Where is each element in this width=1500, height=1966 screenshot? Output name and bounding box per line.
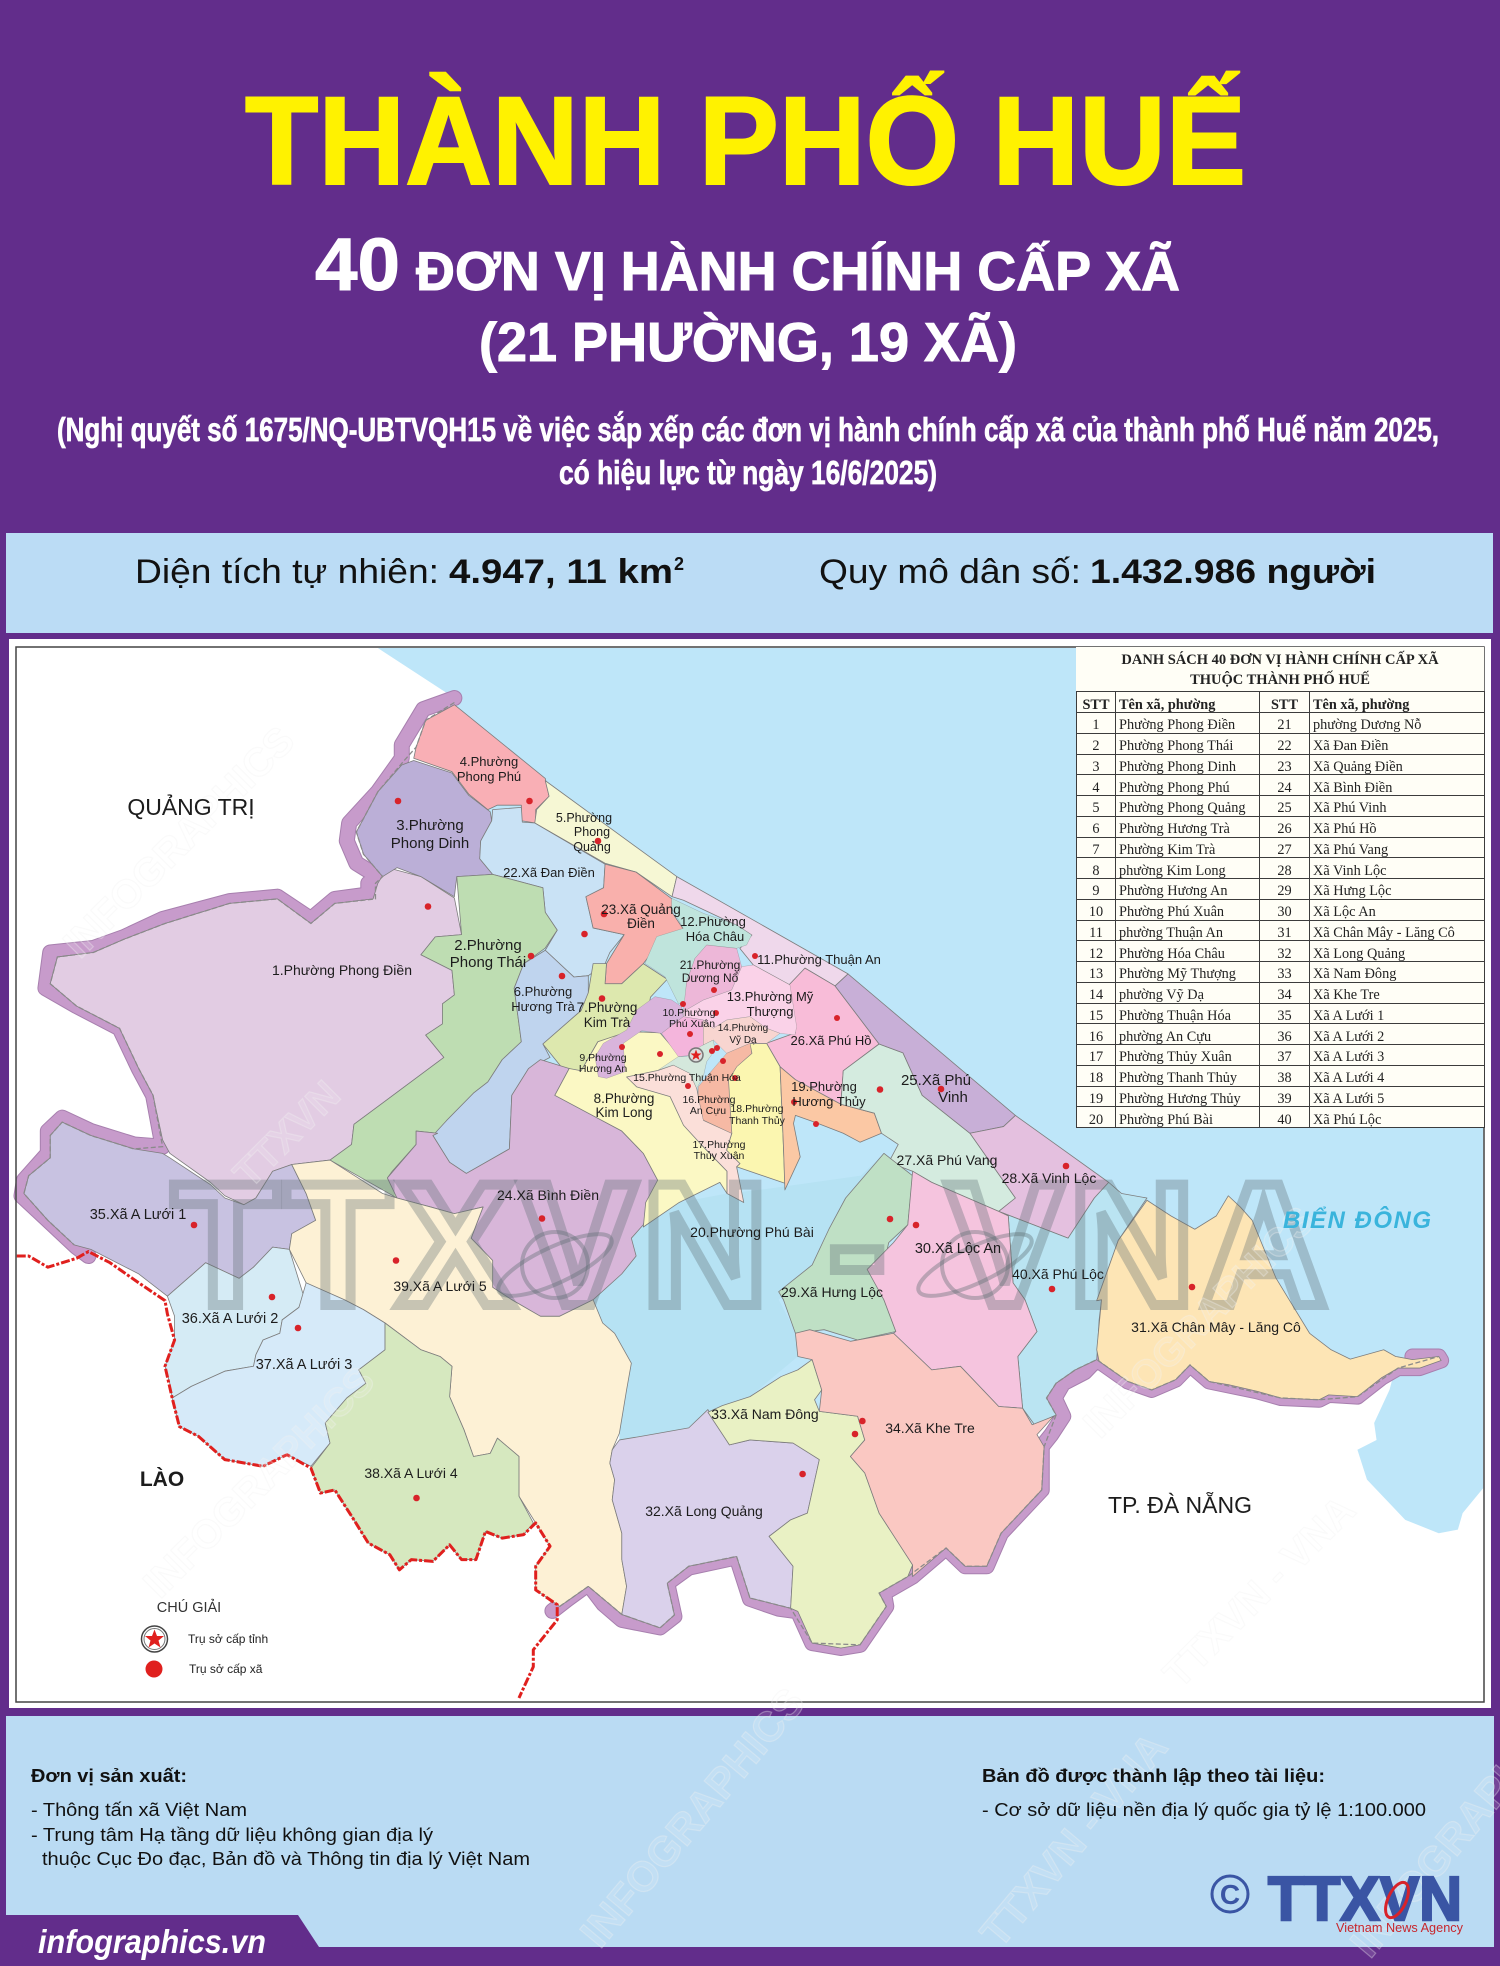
map xyxy=(17,648,1483,1698)
label 37: 37.Xã A Lưới 3 xyxy=(256,1357,352,1373)
table rows: Xã Vinh Lộc xyxy=(1313,863,1387,878)
label 16: An Cựu xyxy=(690,1105,726,1117)
faint diagonal watermarks: TTXVN - VNA xyxy=(1155,1488,1364,1696)
table rows: 9 xyxy=(1092,883,1100,899)
table rows: 10 xyxy=(1089,904,1103,920)
label 15: 15.Phường Thuận Hóa xyxy=(633,1072,741,1084)
info band: area and population: 2 xyxy=(674,554,684,574)
label 12: 12.Phường xyxy=(680,914,746,929)
label 6: Hương Trà xyxy=(511,999,575,1014)
label 29: 29.Xã Hưng Lộc xyxy=(781,1284,883,1300)
subtitle: 40 units xyxy=(315,223,1180,306)
region 7 Kim Trà xyxy=(543,964,667,1071)
table rows: 8 xyxy=(1092,863,1100,878)
table rows: Xã Lộc An xyxy=(1313,904,1376,920)
label 3: Phong Dinh xyxy=(391,835,469,852)
table rows: Phường Phong Phú xyxy=(1119,780,1230,796)
label 3: 3.Phường xyxy=(396,817,464,834)
table rows: 38 xyxy=(1277,1070,1292,1086)
icon: copyright xyxy=(1212,1876,1248,1912)
producer credits: - Trung tâm Hạ tầng dữ liệu không gian địa lý xyxy=(31,1825,433,1845)
label 19: 19.Phường xyxy=(791,1079,857,1094)
producer credits: - Thông tấn xã Việt Nam xyxy=(31,1800,247,1820)
region 39 A Lưới 5 xyxy=(289,1160,631,1614)
footer watermarks: INFOGRAPHICS xyxy=(571,1679,814,1956)
province border band (south) xyxy=(552,1356,1441,1648)
sea: Biển Đông xyxy=(378,648,1483,1533)
region 5 Phong Quảng xyxy=(535,781,677,897)
region 34 Khe Tre xyxy=(795,1330,1054,1577)
region 28 Vinh Lộc xyxy=(970,1115,1109,1238)
source credits xyxy=(982,1766,1426,1820)
label 17: Thủy Xuân xyxy=(694,1150,745,1162)
table rows: 1 xyxy=(1092,717,1100,733)
label 18: Thanh Thủy xyxy=(729,1115,786,1127)
producer credits: Đơn vị sản xuất: xyxy=(31,1766,187,1786)
communes and wards xyxy=(24,705,1441,1648)
table rows: 23 xyxy=(1277,759,1292,775)
table rows: phường Thuận An xyxy=(1119,925,1223,941)
label 5: 5.Phường xyxy=(556,811,612,825)
label 12: Hóa Châu xyxy=(686,929,744,944)
label 8: 8.Phường xyxy=(594,1091,654,1106)
table rows: Xã A Lưới 5 xyxy=(1313,1091,1384,1107)
label 14: 14.Phường xyxy=(718,1023,768,1034)
label 35: 35.Xã A Lưới 1 xyxy=(90,1207,186,1223)
region 4 Phong Phú xyxy=(414,705,549,823)
table rows: Xã Nam Đông xyxy=(1313,966,1396,982)
table heading: DANH SÁCH 40 ĐƠN VỊ HÀNH CHÍNH CẤP XÃ xyxy=(1121,652,1439,668)
table rows: Phường Thủy Xuân xyxy=(1119,1049,1232,1065)
table rows: 20 xyxy=(1089,1112,1103,1128)
label 22: 22.Xã Đan Điền xyxy=(503,865,595,880)
label 26: 26.Xã Phú Hồ xyxy=(791,1033,871,1048)
region 29 Hưng Lộc xyxy=(779,1153,913,1340)
table rows: 30 xyxy=(1277,904,1292,920)
label 38: 38.Xã A Lưới 4 xyxy=(364,1465,458,1481)
producer credits: thuộc Cục Đo đạc, Bản đồ và Thông tin địa lý Việt Nam xyxy=(42,1849,530,1869)
table rows: Phường Thanh Thủy xyxy=(1119,1070,1237,1086)
table rows: 28 xyxy=(1277,863,1292,878)
table rows: Xã Phú Hồ xyxy=(1313,821,1377,837)
legend: commune headquarters icon xyxy=(146,1660,162,1678)
region 19 Hương Thủy xyxy=(780,1067,882,1190)
resolution note xyxy=(57,411,1439,491)
producer credits xyxy=(31,1766,530,1869)
region 9 Hương An xyxy=(595,997,683,1078)
label 28: 28.Xã Vinh Lộc xyxy=(1002,1170,1096,1186)
table rows: 7 xyxy=(1092,842,1100,858)
icon: copyright: C xyxy=(1220,1879,1240,1910)
table rows: 13 xyxy=(1089,966,1103,982)
region 22 Đan Điền xyxy=(480,807,624,977)
label 36: 36.Xã A Lưới 2 xyxy=(182,1311,278,1327)
logo: TTXVN: Vietnam News Agency xyxy=(1336,1920,1463,1935)
table rows: Xã Hưng Lộc xyxy=(1313,883,1391,899)
region 27 Phú Vang xyxy=(841,1044,1015,1211)
table rows: Xã A Lưới 3 xyxy=(1313,1049,1384,1065)
info band: area and population xyxy=(6,533,1493,633)
region 2 Phong Thái xyxy=(330,874,557,1198)
info band: area and population: 1.432.986 người xyxy=(1090,553,1376,591)
headquarters dots xyxy=(191,798,1195,1501)
label 1: 1.Phường Phong Điền xyxy=(272,962,412,978)
table rows: 24 xyxy=(1277,780,1292,796)
info band: area and population: Diện tích tự nhiên: xyxy=(135,553,439,591)
resolution note: có hiệu lực từ ngày 16/6/2025) xyxy=(559,454,937,491)
table rows: Xã Phú Vinh xyxy=(1313,800,1387,816)
label 23: 23.Xã Quảng xyxy=(601,902,681,917)
provincial headquarters star xyxy=(689,1048,703,1062)
label 5: Phong xyxy=(574,825,610,839)
table rows: Xã Quảng Điền xyxy=(1313,759,1403,775)
label 21: 21.Phường xyxy=(680,958,740,972)
table rows: 34 xyxy=(1277,987,1292,1003)
footer watermarks xyxy=(571,1679,1500,1966)
table rows: Xã Phú Vang xyxy=(1313,842,1388,858)
table rows: Xã Bình Điền xyxy=(1313,780,1392,796)
table rows: phường Dương Nỗ xyxy=(1313,717,1421,733)
label 2: 2.Phường xyxy=(454,937,522,954)
table rows: 21 xyxy=(1277,717,1292,733)
region 15 Thuận Hóa xyxy=(658,1040,715,1088)
label 4: Phong Phú xyxy=(457,769,521,784)
table rows: 16 xyxy=(1089,1029,1103,1044)
map frame xyxy=(16,647,1484,1702)
faint diagonal watermarks: TTXVN xyxy=(225,1073,349,1196)
legend: CHÚ GIẢI xyxy=(157,1599,221,1616)
region 13 Mỹ Thượng xyxy=(683,965,797,1035)
label 30: 30.Xã Lộc An xyxy=(915,1241,1001,1257)
table rows: STT xyxy=(1082,696,1110,712)
watermark globes xyxy=(491,1222,1039,1308)
label 23: Điền xyxy=(627,916,655,931)
table rows: 39 xyxy=(1277,1091,1292,1107)
map panel background xyxy=(9,639,1491,1708)
table rows: 19 xyxy=(1089,1091,1103,1107)
table rows: 12 xyxy=(1089,946,1103,962)
table rows: Xã Đan Điền xyxy=(1313,738,1388,754)
label 10: Phú Xuân xyxy=(669,1018,715,1030)
label Đà Nẵng: TP. ĐÀ NẴNG xyxy=(1108,1491,1252,1518)
region 38 A Lưới 4 xyxy=(311,1323,533,1570)
region 1 Phong Điền xyxy=(50,868,462,1205)
province border band (north) xyxy=(22,698,454,1256)
subtitle: 40 units: ĐƠN VỊ HÀNH CHÍNH CẤP XÃ xyxy=(416,240,1180,302)
table rows: Tên xã, phường xyxy=(1313,696,1409,712)
label 39: 39.Xã A Lưới 5 xyxy=(393,1278,487,1294)
table rows: Phường Phú Xuân xyxy=(1119,904,1224,920)
label 11: 11.Phường Thuận An xyxy=(757,952,881,967)
table rows: STT xyxy=(1271,696,1298,712)
label 8: Kim Long xyxy=(595,1105,653,1120)
label 33: 33.Xã Nam Đông xyxy=(711,1406,819,1422)
region 37 A Lưới 3 xyxy=(172,1283,385,1466)
table rows: 2 xyxy=(1092,738,1100,754)
table rows: Xã Khe Tre xyxy=(1313,987,1380,1003)
table rows: 40 xyxy=(1277,1112,1292,1128)
table rows: 15 xyxy=(1089,1008,1103,1024)
table rows: 5 xyxy=(1092,800,1100,816)
table rows: 29 xyxy=(1277,883,1292,899)
region 14 Vỹ Dạ xyxy=(703,1017,780,1053)
label 24: 24.Xã Bình Điền xyxy=(497,1187,599,1203)
table rows: Phường Kim Trà xyxy=(1119,842,1215,858)
info band: area and population: Quy mô dân số: xyxy=(819,553,1081,591)
table rows: Phường Phong Điền xyxy=(1119,717,1235,733)
info band: area and population: 4.947, 11 km xyxy=(449,553,673,591)
label 9: Hương An xyxy=(579,1063,627,1075)
table rows: phường An Cựu xyxy=(1119,1029,1211,1044)
table rows: Phường Hóa Châu xyxy=(1119,946,1225,962)
table rows: 25 xyxy=(1277,800,1292,816)
table rows: 22 xyxy=(1277,738,1292,754)
table rows: 32 xyxy=(1277,946,1292,962)
table rows: 14 xyxy=(1089,987,1103,1003)
region 8 Kim Long xyxy=(555,1032,727,1227)
table rows: 27 xyxy=(1277,842,1292,858)
label 20: 20.Phường Phú Bài xyxy=(690,1224,814,1240)
label 7: Kim Trà xyxy=(584,1015,631,1030)
region 31 Chân Mây - Lăng Cô xyxy=(1097,1196,1441,1400)
faint diagonal watermarks: INFOGRAPHICS xyxy=(135,1358,383,1606)
table rows: Phường Hương Thủy xyxy=(1119,1091,1241,1107)
label 2: Phong Thái xyxy=(450,954,526,971)
label 16: 16.Phường xyxy=(682,1094,736,1106)
label 32: 32.Xã Long Quảng xyxy=(645,1503,763,1519)
table rows: Xã A Lưới 2 xyxy=(1313,1029,1384,1044)
region 16 An Cựu xyxy=(698,1043,752,1133)
label 17: 17.Phường xyxy=(692,1139,746,1151)
table rows: Xã Phú Lộc xyxy=(1313,1112,1381,1128)
table rows: Xã Long Quảng xyxy=(1313,946,1405,962)
tab: infographics.vn xyxy=(0,1915,319,1966)
label 7: 7.Phường xyxy=(577,1000,637,1015)
region 36 A Lưới 2 xyxy=(165,1247,304,1398)
table rows xyxy=(1076,691,1485,1128)
region 35 A Lưới 1 xyxy=(24,1122,316,1296)
table rows: Phường Mỹ Thượng xyxy=(1119,966,1236,982)
table rows: Phường Phong Quảng xyxy=(1119,800,1246,816)
table rows: Xã Chân Mây - Lăng Cô xyxy=(1313,925,1455,941)
region 6 Hương Trà xyxy=(433,950,588,1173)
label 13: 13.Phường Mỹ xyxy=(727,989,814,1004)
table rows: 33 xyxy=(1277,966,1292,982)
label 10: 10.Phường xyxy=(662,1007,716,1019)
region 33 Nam Đông xyxy=(708,1360,913,1648)
region 26 Phú Hồ xyxy=(764,968,879,1104)
region 3 Phong Dinh xyxy=(356,761,493,897)
footer panel xyxy=(0,1679,1500,1966)
label 27: 27.Xã Phú Vang xyxy=(897,1152,997,1168)
faint diagonal watermarks xyxy=(55,718,1364,1696)
label 19: Hương Thủy xyxy=(792,1094,866,1109)
watermark: TTXVN - VNA: TTXVN - VNA xyxy=(172,1148,1327,1343)
table rows: 26 xyxy=(1277,821,1292,837)
table rows: phường Vỹ Dạ xyxy=(1119,987,1204,1003)
label 25: 25.Xã Phú xyxy=(901,1072,971,1089)
label 5: Quảng xyxy=(573,840,611,854)
table rows: Xã A Lưới 4 xyxy=(1313,1070,1384,1086)
label 13: Thượng xyxy=(747,1004,793,1019)
table rows: 11 xyxy=(1089,925,1103,941)
table rows: Phường Thuận Hóa xyxy=(1119,1008,1231,1024)
label 25: Vinh xyxy=(938,1089,968,1106)
faint diagonal watermarks: INFOGRAPHICS xyxy=(1075,1198,1323,1446)
label 31: 31.Xã Chân Mây - Lăng Cô xyxy=(1131,1319,1301,1335)
table rows: Phường Phú Bài xyxy=(1119,1112,1213,1128)
subtitle: 21 wards, 19 communes: (21 PHƯỜNG, 19 XÃ) xyxy=(479,311,1017,373)
region 12 Hóa Châu xyxy=(645,898,752,1003)
region 17 Thủy Xuân xyxy=(627,1065,744,1202)
footer watermarks: TTXVN - VNA xyxy=(971,1724,1176,1956)
source credits: - Cơ sở dữ liệu nền địa lý quốc gia tỷ lệ 1:100.000 xyxy=(982,1800,1426,1820)
dashed province boundary lines xyxy=(24,702,1439,1645)
legend xyxy=(142,1599,268,1678)
table rows: Phường Phong Thái xyxy=(1119,738,1233,754)
region 25 Phú Vinh xyxy=(835,974,1015,1133)
table rows: 37 xyxy=(1277,1049,1292,1065)
legend: Trụ sở cấp xã xyxy=(189,1662,263,1676)
table rows: 17 xyxy=(1089,1049,1103,1065)
table rows: Phường Hương Trà xyxy=(1119,821,1230,837)
region 30 Lộc An xyxy=(867,1171,1037,1408)
label 6: 6.Phường xyxy=(514,984,572,999)
inner-city wards xyxy=(595,898,797,1133)
tab: infographics.vn: infographics.vn xyxy=(38,1923,266,1960)
subtitle: 40 units: 40 xyxy=(315,223,400,306)
faint diagonal watermarks: INFOGRAPHICS xyxy=(55,718,303,966)
table: list of 40 commune-level units xyxy=(1076,647,1484,1127)
label 18: 18.Phường xyxy=(730,1103,784,1115)
label 9: 9.Phường xyxy=(579,1052,627,1064)
legend: Trụ sở cấp tỉnh xyxy=(188,1632,268,1646)
table rows: 31 xyxy=(1277,925,1292,941)
label 4: 4.Phường xyxy=(460,754,518,769)
region 23 Quảng Điền xyxy=(586,864,684,984)
legend: provincial headquarters icon xyxy=(142,1626,168,1652)
table heading: THUỘC THÀNH PHỐ HUẾ xyxy=(1190,672,1370,688)
title: THÀNH PHỐ HUẾ xyxy=(245,72,1246,211)
table heading xyxy=(1121,650,1439,688)
logo: TTXVN: TTXVN xyxy=(1268,1865,1462,1934)
source credits: Bản đồ được thành lập theo tài liệu: xyxy=(982,1766,1325,1786)
label Biển Đông: BIỂN ĐÔNG xyxy=(1283,1206,1431,1234)
label 40: 40.Xã Phú Lộc xyxy=(1012,1266,1104,1282)
region 40 Phú Lộc xyxy=(999,1182,1147,1425)
table rows: 36 xyxy=(1277,1029,1292,1044)
label 34: 34.Xã Khe Tre xyxy=(885,1420,975,1436)
table rows: Tên xã, phường xyxy=(1119,696,1215,712)
table rows: Phường Hương An xyxy=(1119,883,1227,899)
table rows: 35 xyxy=(1277,1008,1292,1024)
table rows: Phường Phong Dinh xyxy=(1119,759,1236,775)
label 21: Dương Nổ xyxy=(682,971,739,985)
label Quảng Trị: QUẢNG TRỊ xyxy=(127,792,255,820)
region 21 Dương Nổ xyxy=(683,945,742,1012)
region 24 Bình Điền xyxy=(387,1060,658,1316)
label Lào: LÀO xyxy=(140,1468,184,1491)
table rows: 6 xyxy=(1092,821,1100,837)
map labels xyxy=(90,754,1431,1519)
region 11 Thuận An xyxy=(672,877,848,986)
table rows: phường Kim Long xyxy=(1119,863,1226,878)
region 32 Long Quảng xyxy=(610,1410,819,1628)
table rows: 4 xyxy=(1092,780,1100,796)
table rows: 18 xyxy=(1089,1070,1103,1086)
region 20 Phú Bài xyxy=(593,1153,913,1440)
national border with Laos xyxy=(17,1252,557,1698)
region 10 Phú Xuân xyxy=(662,1017,703,1057)
table rows: Xã A Lưới 1 xyxy=(1313,1008,1384,1024)
label 14: Vỹ Dạ xyxy=(729,1035,757,1046)
table rows: 3 xyxy=(1092,759,1100,775)
region 18 Thanh Thủy xyxy=(727,1044,785,1183)
